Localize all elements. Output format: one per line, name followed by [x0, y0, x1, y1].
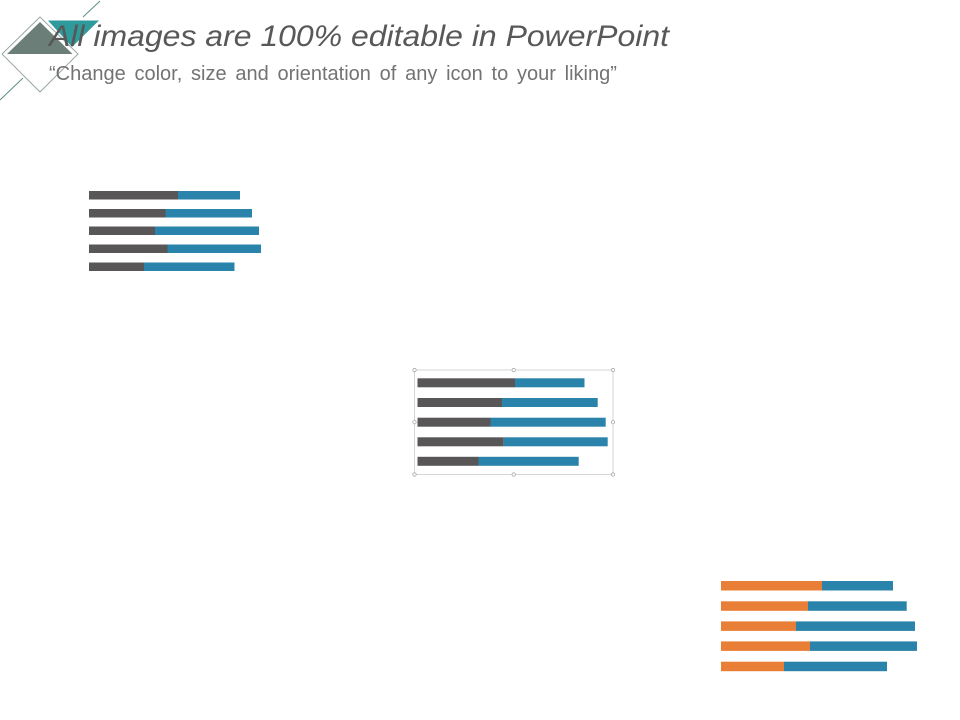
chart: bottom-right stacked bars	[721, 581, 917, 671]
title: All images are 100% editable in PowerPoint	[47, 20, 671, 53]
chart: top-left stacked bars	[89, 191, 261, 271]
chart: center stacked bars with selection frame	[413, 368, 615, 476]
icon: header diamond emblem	[0, 1, 100, 100]
subtitle: “Change color, size and orientation of any icon to your liking”	[49, 63, 617, 85]
